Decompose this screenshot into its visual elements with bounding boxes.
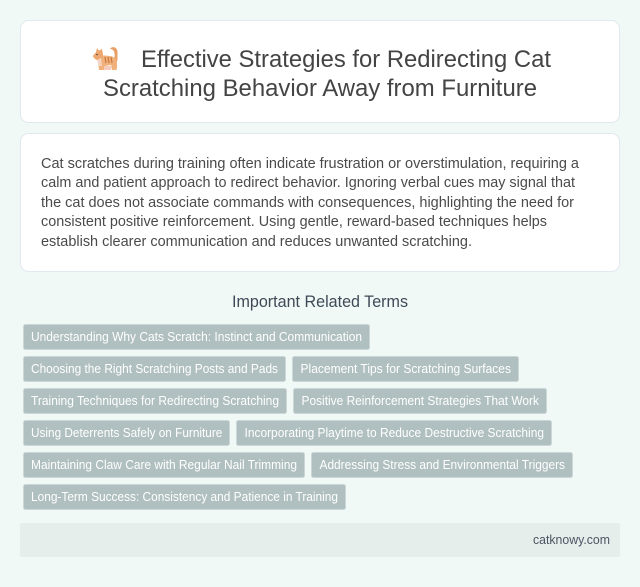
footer bar: [20, 523, 620, 557]
chip 7: Incorporating Playtime to Reduce Destructive Scratching: [244, 426, 544, 440]
chip 2: [24, 356, 286, 382]
panel: title card: [20, 20, 620, 122]
chip 1: [24, 324, 370, 350]
chip 3: [292, 356, 518, 382]
title line 2: Scratching Behavior Away from Furniture: [103, 75, 537, 102]
chip 4: [24, 388, 286, 414]
chip 6: [24, 420, 230, 446]
body line 1: Cat scratches during training often indicate frustration or overstimulation, requiring a: [41, 156, 580, 172]
panel: term chips: [24, 324, 572, 510]
body line 2: calm and patient approach to redirect behavior. Ignoring verbal cues may signal that: [41, 175, 575, 191]
chip 3: Placement Tips for Scratching Surfaces: [300, 362, 511, 376]
body line 4: consistent positive reinforcement. Using gentle, reward-based techniques helps: [41, 214, 547, 230]
footer site name: catknowy.com: [533, 532, 610, 547]
chip 9: [312, 452, 572, 478]
heading: related terms: Important Related Terms: [232, 293, 408, 311]
chip 6: Using Deterrents Safely on Furniture: [31, 426, 222, 440]
chip 5: Positive Reinforcement Strategies That Work: [302, 394, 540, 408]
chip 2: Choosing the Right Scratching Posts and Pads: [31, 362, 278, 376]
chip 1: Understanding Why Cats Scratch: Instinct and Communication: [31, 330, 362, 344]
chip 7: [236, 420, 552, 446]
chip 4: Training Techniques for Redirecting Scratching: [31, 394, 279, 408]
chip 10: [24, 484, 346, 510]
chip 10: Long-Term Success: Consistency and Patience in Training: [31, 490, 338, 504]
panel: description: [20, 134, 620, 272]
chip 8: Maintaining Claw Care with Regular Nail Trimming: [31, 458, 297, 472]
chip 8: [24, 452, 304, 478]
chip 5: [294, 388, 546, 414]
chip 9: Addressing Stress and Environmental Triggers: [320, 458, 565, 472]
title line 1: Effective Strategies for Redirecting Cat: [141, 46, 551, 73]
icon: cat: [93, 47, 118, 70]
body line 3: the cat does not associate commands with consequences, highlighting the need for: [41, 195, 574, 211]
body line 5: establish clearer communication and reduces unwanted scratching.: [41, 234, 472, 250]
